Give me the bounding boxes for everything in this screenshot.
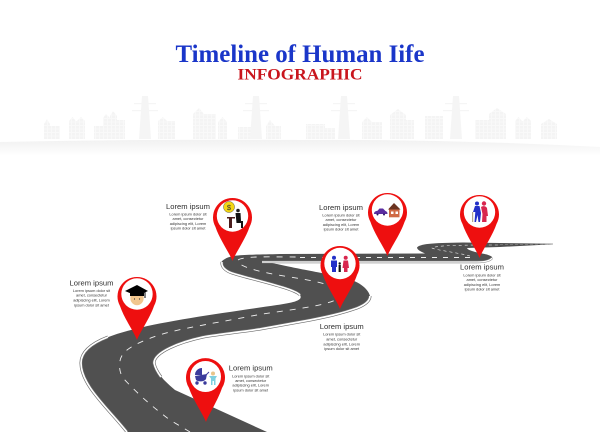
text: baby: Lorem ipsum dolor sit [232,373,270,378]
icon: family [331,256,349,272]
title: Timeline of Human Iife [176,41,424,68]
text: baby: Lorem ipsum [229,364,273,373]
text: baby: amet, consectetur [235,378,267,383]
text: baby: ipsum dolor sit amet [233,387,269,392]
text: graduation: Lorem ipsum [70,279,113,288]
text: home and car: Lorem ipsum [319,203,363,212]
text: graduation [70,279,113,307]
text: home and car: ipsum dolor sit amet [324,226,359,231]
winding road [81,242,553,432]
text: graduation: adipiscing elit, Lorem [73,298,110,303]
text: old age: adipiscing elit, Lorem [464,282,500,287]
text: career [166,202,210,231]
text: career: ipsum dolor sit amet [171,226,206,231]
text: career: Lorem ipsum dolor sit [169,212,208,216]
text: old age: amet, consectetur [467,277,498,282]
text: graduation: ipsum dolor sit amet [74,302,110,307]
road centre dashes [119,244,548,432]
text: home and car: amet, consectetur [326,217,357,222]
pin: home and car stage [368,193,407,256]
text: career: adipiscing elit, Lorem [170,221,206,226]
pin: career stage [213,198,252,261]
text: home and car: adipiscing elit, Lorem [323,222,359,227]
text: home and car [319,203,363,231]
text: family: adipiscing elit, Lorem [323,341,360,346]
road edge lines [81,258,492,432]
background: city skyline [0,96,600,156]
text: graduation: Lorem ipsum dolor sit [73,288,111,293]
icon: graduate with cap [125,285,148,305]
text: old age: Lorem ipsum [460,263,504,272]
text: career: Lorem ipsum [166,202,210,211]
pin: old age stage [460,195,499,258]
text: old age [460,263,504,291]
pin: graduation stage [118,277,157,340]
text: old age: Lorem ipsum dolor sit [463,272,502,277]
text: family: Lorem ipsum dolor sit [323,332,361,337]
text: career: amet, consectetur [173,216,204,221]
icon: baby stroller and child [195,368,217,385]
icon: car and house [374,203,400,217]
text: home and car: Lorem ipsum dolor sit [322,212,361,217]
text: family: Lorem ipsum [320,322,364,331]
text: baby [229,364,273,392]
icon: office worker with coin: $ [227,203,232,212]
text: family: ipsum dolor sit amet [324,346,360,351]
pin: family stage [320,246,360,309]
text: graduation: amet, consectetur [76,293,108,298]
subtitle: INFOGRAPHIC [238,66,362,84]
text: family: amet, consectetur [326,336,358,341]
text: baby: adipiscing elit, Lorem [232,383,269,388]
text: old age: ipsum dolor sit amet [465,286,500,291]
pin: baby stage [186,358,225,422]
text: family [320,322,364,351]
icon: elderly couple [473,201,488,222]
